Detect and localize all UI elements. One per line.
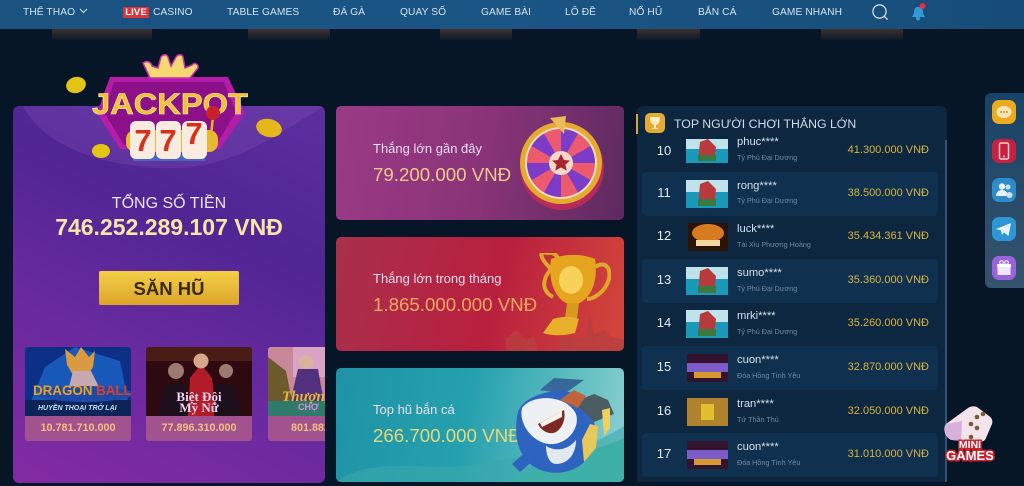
side toolbar (985, 93, 1024, 288)
button: san hu: SĂN HŨ (134, 278, 204, 299)
game card: dragon ball: HUYỀN THOẠI TRỞ LẠI (38, 405, 117, 412)
text: heading: TOP NGƯỜI CHƠI THẮNG LỚN (674, 117, 856, 131)
row 13: 13 (657, 272, 671, 287)
row 15: 15 (657, 359, 671, 374)
scrollbar (945, 140, 947, 482)
game card: dragon ball (25, 347, 131, 441)
row 14: Tỷ Phú Đại Dương (737, 327, 797, 336)
heading: top winners (636, 113, 856, 134)
nav: the thao: THỂ THAO (23, 7, 75, 18)
row 13: Tỷ Phú Đại Dương (737, 284, 797, 293)
row 13: sumo**** (737, 267, 782, 279)
icon: gold trophy (540, 253, 611, 336)
row 17: 31.010.000 VNĐ (848, 448, 929, 460)
game card: dragon ball: 10.781.710.000 (40, 422, 116, 434)
game card: biet doi my nu: 77.896.310.000 (161, 422, 237, 434)
value: recent wins: 79.200.000 VNĐ (373, 164, 511, 185)
row 12 (657, 223, 929, 251)
icon: gift (992, 256, 1016, 280)
icon: jackpot 777 logo: JACKPOT (92, 88, 248, 121)
banner remnants behind nav (52, 29, 903, 39)
row 10: 41.300.000 VNĐ (848, 144, 929, 156)
row 13: 35.360.000 VNĐ (848, 274, 929, 286)
row 14 (657, 310, 929, 338)
nav: table games: TABLE GAMES (227, 7, 299, 18)
icon: mini games dice: GAMES (946, 448, 994, 463)
accent bar (636, 114, 638, 134)
icon: telegram (992, 217, 1016, 241)
game card: thuong cho: CHỢ (298, 402, 319, 412)
nav: game bai: GAME BÀI (481, 7, 531, 18)
row 17: Đóa Hồng Tình Yêu (737, 458, 800, 467)
nav: quay so: QUAY SỐ (400, 7, 446, 18)
panel: top winners leaderboard (637, 106, 947, 482)
text: recent wins label: Thắng lớn gần đây (373, 141, 482, 156)
row 11 (642, 172, 938, 216)
nav: live casino (123, 7, 193, 18)
row 12: Tài Xỉu Phượng Hoàng (737, 240, 811, 249)
row 10: 10 (657, 143, 671, 158)
icon: prize wheel (520, 116, 604, 210)
row 17: cuon**** (737, 441, 779, 453)
row 16 (657, 398, 929, 426)
icon: shark (512, 378, 624, 482)
row 11: rong**** (737, 180, 777, 192)
row 12: luck**** (737, 223, 774, 235)
icon: jackpot 777 logo: 7 (134, 123, 152, 158)
row 17 (642, 433, 938, 477)
nav: game nhanh: GAME NHANH (772, 7, 842, 18)
icon: mini games dice: MINI (959, 439, 981, 451)
row 10 (657, 136, 929, 163)
row 11: Tỷ Phú Đại Dương (737, 196, 797, 205)
nav: live casino: LIVE (125, 7, 147, 18)
row 12: 35.434.361 VNĐ (848, 230, 929, 242)
row 15 (642, 346, 938, 390)
label: total amount: TỔNG SỐ TIỀN (112, 195, 226, 212)
row 15: cuon**** (737, 354, 779, 366)
icon: search (872, 4, 888, 20)
row 15: 32.870.000 VNĐ (848, 361, 929, 373)
game card: biet doi my nu: Biệt Đội (176, 389, 222, 404)
value: total jackpot: 746.252.289.107 VNĐ (55, 214, 283, 240)
game card: dragon ball: DRAGON BALL (33, 383, 131, 398)
icon: support group (992, 178, 1016, 202)
game card: biet doi my nu (146, 347, 252, 441)
row 16: tran**** (737, 398, 774, 410)
icon: trophy badge (645, 113, 665, 133)
card: monthly big wins (336, 237, 624, 351)
row 13 (642, 259, 938, 303)
nav: live casino: CASINO (153, 7, 193, 18)
icon: notification bell (912, 3, 926, 20)
row 12: 12 (657, 228, 671, 243)
row 10: Tỷ Phú Đại Dương (737, 153, 797, 162)
row 15: Đóa Hồng Tình Yêu (737, 371, 800, 380)
row 11: 38.500.000 VNĐ (848, 187, 929, 199)
row 14: 35.260.000 VNĐ (848, 317, 929, 329)
panel: jackpot total (13, 106, 325, 483)
game card: biet doi my nu: Mỹ Nữ (179, 400, 219, 415)
button: san hu (99, 271, 239, 305)
nav: lo de: LÔ ĐỀ (565, 7, 596, 18)
nav: ban ca: BẮN CÁ (698, 7, 737, 18)
value: fish jackpot: 266.700.000 VNĐ (373, 425, 522, 446)
value: monthly wins: 1.865.000.000 VNĐ (373, 294, 537, 315)
icon: mini games dice (944, 406, 995, 464)
nav: no hu: NỔ HŨ (629, 7, 662, 18)
row 11: 11 (657, 185, 671, 200)
row 16: 16 (657, 403, 671, 418)
row 14: mrki**** (737, 310, 776, 322)
row 17: 17 (657, 446, 671, 461)
row 14: 14 (657, 315, 671, 330)
icon: jackpot 777 logo: 7 (159, 123, 177, 158)
icon: phone (992, 139, 1016, 163)
card: top fish jackpots (336, 368, 624, 482)
nav: da ga: ĐÁ GÀ (333, 7, 365, 18)
row 10: phuc**** (737, 136, 779, 148)
icon: chat (992, 100, 1016, 124)
text: fish jackpot label: Top hũ bắn cá (373, 402, 455, 417)
game card: thuong cho (268, 347, 374, 441)
text: monthly wins label: Thắng lớn trong tháng (373, 271, 502, 286)
icon: jackpot 777 logo: 7 (185, 116, 203, 151)
card: recent big wins (336, 106, 624, 220)
icon: jackpot 777 logo (66, 54, 282, 161)
row 16: 32.050.000 VNĐ (848, 405, 929, 417)
navigation bar (0, 0, 1024, 29)
row 16: Tứ Thần Thú (737, 415, 779, 424)
